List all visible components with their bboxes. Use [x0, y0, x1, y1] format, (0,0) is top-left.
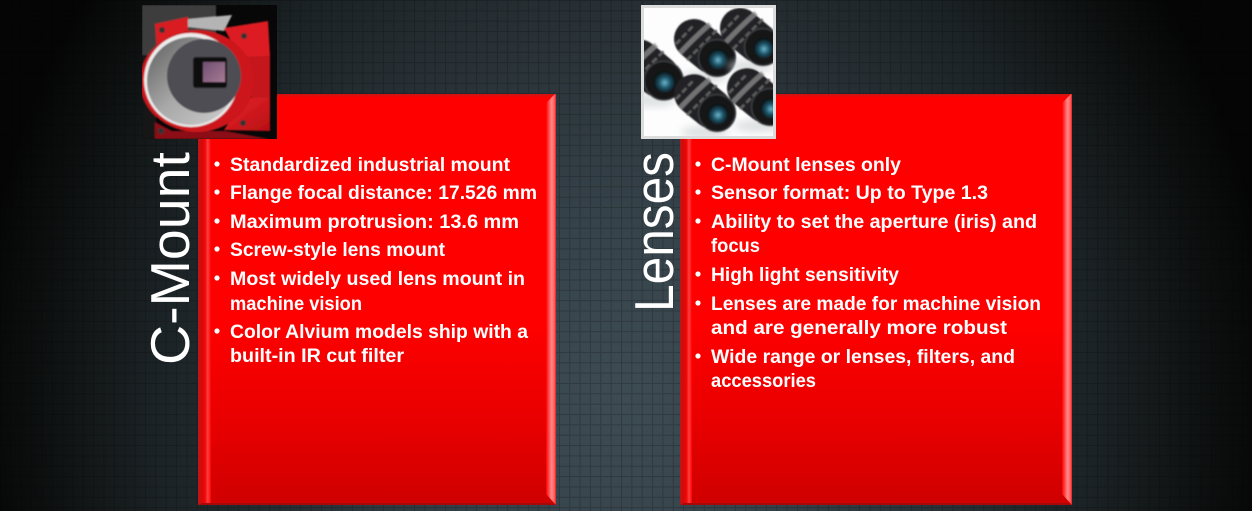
C-Mount bullet list: Color Alvium models ship with a — [230, 321, 528, 343]
Lenses bullet list: Lenses are made for machine vision — [711, 293, 1041, 315]
Lenses bullet list — [695, 154, 1041, 392]
C-Mount bullet list: Most widely used lens mount in — [230, 268, 525, 290]
heading: Lenses: Lenses — [623, 152, 685, 312]
C-Mount bullet list: Maximum protrusion: 13.6 mm — [230, 211, 519, 233]
panel: Lenses — [680, 94, 1072, 505]
Lenses bullet list: High light sensitivity — [711, 264, 899, 286]
C-Mount bullet list — [214, 154, 537, 367]
panel: C-Mount — [198, 94, 556, 505]
icon: group of machine vision lenses photo — [641, 5, 776, 139]
Lenses bullet list: focus — [711, 235, 760, 257]
Lenses bullet list: Sensor format: Up to Type 1.3 — [711, 182, 988, 204]
C-Mount bullet list: Flange focal distance: 17.526 mm — [230, 182, 537, 204]
C-Mount bullet list: Screw-style lens mount — [230, 239, 445, 261]
panel body: C-Mount — [198, 94, 556, 505]
Lenses bullet list: Ability to set the aperture (iris) and — [711, 211, 1037, 233]
C-Mount bullet list: built-in IR cut filter — [230, 345, 404, 367]
Lenses bullet list: Wide range or lenses, filters, and — [711, 346, 1015, 368]
C-Mount bullet list: Standardized industrial mount — [230, 154, 510, 176]
Lenses bullet list: and are generally more robust — [711, 317, 1008, 339]
Lenses bullet list: C-Mount lenses only — [711, 154, 901, 176]
icon: red C-Mount camera photo — [140, 5, 277, 139]
Lenses bullet list: accessories — [711, 370, 816, 392]
C-Mount bullet list: machine vision — [230, 293, 362, 315]
panel body: Lenses — [680, 94, 1072, 505]
heading: C-Mount: C-Mount — [139, 152, 201, 365]
